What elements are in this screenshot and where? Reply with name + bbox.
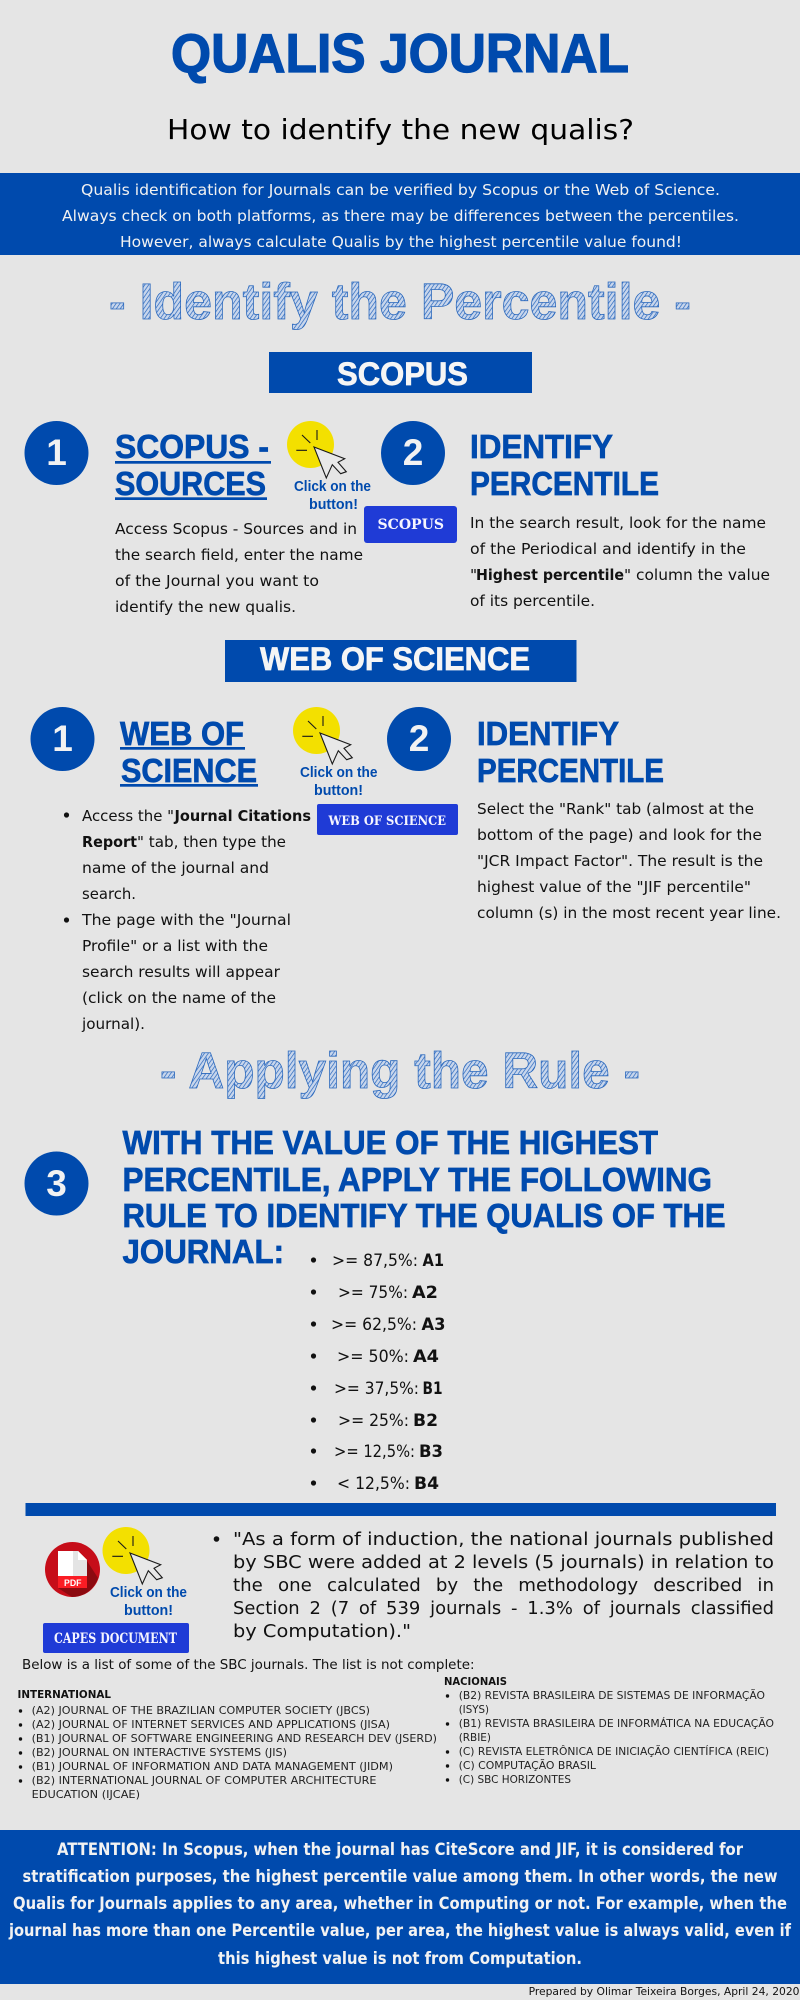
list: national journals: (C) REVISTA ELETRÔNICA DE INICIAÇÃO CIENTÍFICA (REIC) [459,1745,769,1758]
step bullet list: search results will appear [82,963,281,981]
panel: scopus step 2 [381,421,770,610]
step text: Access Scopus - Sources and in [115,520,357,538]
click caption: Click on the [110,1585,187,1601]
step bullet list [64,807,311,1033]
button: web of science: WEB OF SCIENCE [328,814,446,829]
percentile rule list: B4 [414,1474,439,1494]
percentile rule list: A3 [422,1315,446,1335]
heading: applying the rule: - Applying the Rule - [160,1042,640,1099]
number badge 1 [30,707,94,771]
list: national journals: (C) SBC HORIZONTES [459,1773,571,1786]
panel: intro banner: Qualis identification for Journals can be verified by Scopus or the Web of Science. [81,181,720,199]
panel: attention banner: this highest value is not from Computation. [218,1949,582,1968]
panel: capes document [43,1527,189,1653]
panel: step 3 rule [24,1124,726,1494]
step heading: web of science: WEB OF [120,715,244,752]
percentile rule list: >= 62,5%: [331,1315,417,1335]
icon: click cursor [293,707,352,764]
click caption: button! [124,1603,173,1619]
step heading: identify percentile: PERCENTILE [470,465,659,502]
click caption [110,1585,187,1619]
click caption: Click on the [300,765,378,781]
step heading: identify percentile [477,715,664,789]
step text: column (s) in the most recent year line. [477,904,781,922]
step text: of its percentile. [470,592,595,610]
list: national journals: (B2) REVISTA BRASILEIRA DE SISTEMAS DE INFORMAÇÃO [459,1689,765,1702]
step heading: identify percentile: IDENTIFY [477,715,619,752]
quote text: the one calculated by the methodology described in [233,1576,774,1596]
icon: pdf file [45,1542,100,1597]
step heading: identify percentile [470,428,659,502]
click caption: Click on the [294,479,371,495]
number badge 2 [381,421,445,485]
step bullet list: Profile" or a list with the [82,937,268,955]
click caption: button! [314,783,363,799]
heading: web of science: WEB OF SCIENCE [260,641,530,677]
step heading: web of science: SCIENCE [121,752,257,789]
step text: Select the "Rank" tab (almost at the [477,800,754,818]
step bullet list: Report [82,833,138,851]
step heading: identify percentile: PERCENTILE [477,752,664,789]
percentile rule list: >= 37,5%: [334,1379,419,1399]
quote text: Section 2 (7 of 539 journals - 1.3% of journals classified [233,1599,774,1619]
panel: attention banner [0,1830,800,1984]
list: international journals: INTERNATIONAL [18,1688,111,1701]
list: national journals: (ISYS) [459,1703,489,1716]
step heading: web of science [120,715,258,789]
percentile rule list: < 12,5%: [337,1474,410,1494]
step text [470,514,770,610]
step heading: apply rule: RULE TO IDENTIFY THE QUALIS OF THE [122,1197,726,1234]
step bullet list: " tab, then type the [137,833,286,851]
step text [477,800,781,922]
list: international journals: (A2) JOURNAL OF THE BRAZILIAN COMPUTER SOCIETY (JBCS) [32,1704,370,1717]
number badge 2 [387,707,451,771]
panel: intro banner: However, always calculate Qualis by the highest percentile value found! [120,233,682,251]
list: international journals: (B1) JOURNAL OF INFORMATION AND DATA MANAGEMENT (JIDM) [32,1760,393,1773]
heading: web of science [225,640,576,682]
button: web of science [317,804,458,835]
percentile rule list: A2 [412,1283,438,1303]
step heading: scopus sources: SOURCES [115,465,266,502]
list: international journals: (B2) INTERNATIONAL JOURNAL OF COMPUTER ARCHITECTURE [32,1774,377,1787]
panel: web of science step 1 [30,707,458,1033]
step bullet list: (click on the name of the [82,989,276,1007]
step bullet list: journal). [81,1015,145,1033]
panel: web of science step 2 [387,707,781,922]
step bullet list: name of the journal and [82,859,269,877]
list: national journals: (RBIE) [459,1731,491,1744]
click caption: button! [309,497,358,513]
step heading: apply rule: JOURNAL: [122,1233,284,1270]
step heading: scopus sources: SCOPUS - [115,428,269,465]
heading: scopus: SCOPUS [337,356,468,392]
step heading: apply rule: WITH THE VALUE OF THE HIGHEST [122,1124,658,1161]
percentile rule list: A4 [413,1347,439,1367]
step text: " column the value [624,566,770,584]
step text [115,520,363,616]
step heading: apply rule: PERCENTILE, APPLY THE FOLLOWING [122,1161,712,1198]
step text: " [470,566,477,584]
percentile rule list: >= 25%: [338,1411,409,1431]
number badge 1: 1 [52,718,73,759]
quote text: "As a form of induction, the national journals published [233,1530,774,1550]
step text: of the Periodical and identify in the [470,540,746,558]
heading: scopus [269,352,532,393]
percentile rule list [311,1251,446,1494]
button: scopus: SCOPUS [378,517,444,533]
percentile rule list: B3 [419,1442,443,1462]
icon: click cursor [287,421,346,478]
step bullet list: search. [82,885,136,903]
percentile rule list: A1 [422,1251,444,1271]
panel: intro banner: Always check on both platforms, as there may be differences between the percentiles. [62,207,739,225]
step bullet list: The page with the "Journal [81,911,291,929]
panel: attention banner: ATTENTION: In Scopus, when the journal has CiteScore and JIF, it is considered for [57,1840,744,1859]
quote text: by SBC were added at 2 levels (5 journals) in relation to [233,1553,774,1573]
subtitle: How to identify the new qualis? [167,114,634,146]
icon: pdf file: PDF [64,1578,82,1588]
title: QUALIS JOURNAL [171,22,629,84]
list: national journals: (C) COMPUTAÇÃO BRASIL [459,1759,596,1772]
list: international journals: (A2) JOURNAL OF INTERNET SERVICES AND APPLICATIONS (JISA) [32,1718,390,1731]
step text: In the search result, look for the name [470,514,766,532]
step text: the search field, enter the name [115,546,363,564]
list: national journals [444,1675,774,1786]
list: international journals: EDUCATION (IJCAE) [32,1788,140,1801]
click caption [300,765,378,799]
footer credit: Prepared by Olimar Teixeira Borges, April 24, 2020 [529,1985,800,1998]
percentile rule list: >= 50%: [337,1347,409,1367]
panel: scopus step 1 [24,421,457,616]
step text: "JCR Impact Factor". The result is the [477,852,763,870]
heading: identify the percentile: - Identify the Percentile - [109,273,691,330]
panel: intro banner [0,173,800,255]
step heading: identify percentile: IDENTIFY [470,428,613,465]
list: international journals: (B2) JOURNAL ON INTERACTIVE SYSTEMS (JIS) [32,1746,287,1759]
step text: bottom of the page) and look for the [477,826,762,844]
list: national journals: NACIONAIS [444,1675,507,1688]
click caption [294,479,371,513]
button: capes document: CAPES DOCUMENT [54,1631,177,1647]
number badge 1: 1 [46,432,67,473]
step bullet list: Journal Citations [174,807,311,825]
percentile rule list: >= 12,5%: [334,1442,415,1462]
percentile rule list: >= 87,5%: [332,1251,418,1271]
percentile rule list: >= 75%: [338,1283,408,1303]
percentile rule list: B1 [422,1379,442,1399]
number badge 3: 3 [46,1163,67,1204]
quote text: by Computation)." [233,1622,411,1642]
number badge 2: 2 [403,432,423,473]
step text: identify the new qualis. [115,598,296,616]
list: national journals: (B1) REVISTA BRASILEIRA DE INFORMÁTICA NA EDUCAÇÃO [459,1717,774,1730]
button: scopus [364,506,457,543]
step heading: apply rule [122,1124,726,1270]
number badge 1 [24,421,88,485]
number badge 3 [24,1152,88,1216]
list: international journals [18,1688,437,1801]
percentile rule list: B2 [413,1411,438,1431]
list: international journals: (B1) JOURNAL OF SOFTWARE ENGINEERING AND RESEARCH DEV (JSERD) [32,1732,437,1745]
number badge 2: 2 [409,718,429,759]
journals intro text: Below is a list of some of the SBC journals. The list is not complete: [22,1657,474,1673]
quote text [214,1530,774,1642]
step text: Highest percentile [476,566,624,584]
step text: highest value of the "JIF percentile" [477,878,751,896]
step heading: scopus sources [115,428,271,502]
step text: of the Journal you want to [115,572,319,590]
button: capes document [43,1623,189,1653]
step bullet list: Access the " [82,807,174,825]
icon: click cursor [102,1527,162,1584]
